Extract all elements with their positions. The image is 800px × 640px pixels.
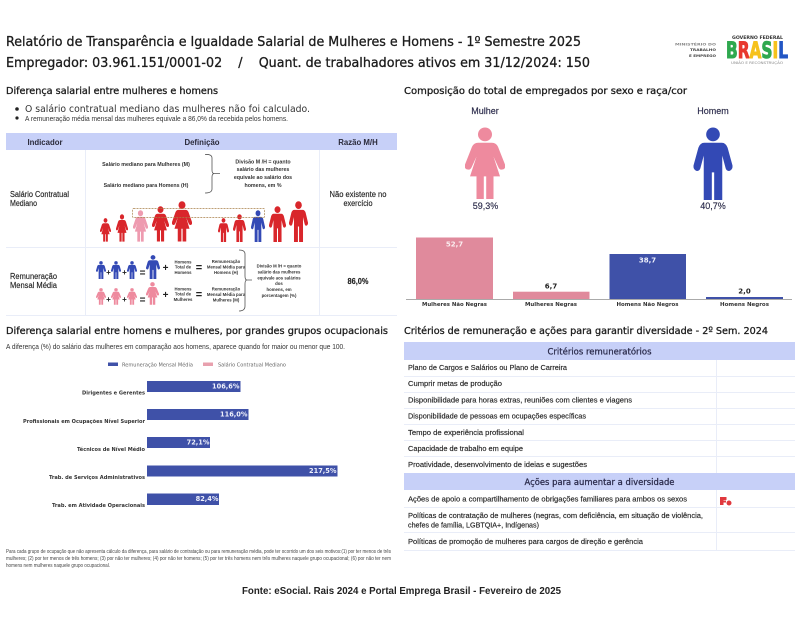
- bar chart: composição por sexo e raça/cor: Homens Negros: [720, 302, 769, 308]
- definition: remuneração mensal média: Homens (H): [214, 270, 239, 275]
- bar chart: composição por sexo e raça/cor: Homens Não Negros: [616, 302, 678, 308]
- logo: ministério e governo federal: MINISTÉRIO DO: [675, 42, 717, 46]
- bar chart: composição por sexo e raça/cor: Mulheres Negras: [525, 302, 577, 308]
- table header: Definição: [184, 138, 220, 147]
- definition: remuneração mensal média: Divisão M /H = quanto: [257, 264, 302, 268]
- definition: remuneração mensal média: dos: [275, 281, 283, 286]
- definition: remuneração mensal média: porcentagem (%): [262, 293, 297, 298]
- pictograma: mulher: Mulher: [471, 106, 499, 116]
- pictograma: homem: 40,7%: [700, 201, 726, 211]
- logo: ministério e governo federal: BRASIL: [726, 39, 788, 64]
- bar chart: composição por sexo e raça/cor: [406, 238, 792, 308]
- panel: critérios e ações: [404, 342, 795, 550]
- row values: Não existente no: [330, 190, 387, 199]
- pictograma: homem: Homem: [697, 106, 729, 116]
- row values: [330, 190, 387, 286]
- table header: Indicador: [27, 138, 63, 147]
- criteria rows: Disponibilidade para horas extras, reuniões com clientes e viagens: [408, 396, 632, 404]
- legend: Salário Contratual Mediano: [218, 362, 286, 368]
- definition: remuneração mensal média: =: [140, 268, 146, 279]
- definition: remuneração mensal média: Total de: [175, 264, 192, 270]
- icon: marcador vermelho: [720, 497, 732, 506]
- heading: diferença por grupos ocupacionais: Diferença salarial entre homens e mulheres, por grandes grupos ocupacionais: [6, 326, 388, 337]
- definition: salário contratual mediano: Salário mediano para Homens (H): [104, 183, 189, 189]
- logo: ministério e governo federal: GOVERNO FEDERAL: [732, 35, 783, 40]
- bullet text block: A remuneração média mensal das mulheres equivale a 86,0% da recebida pelos homens.: [25, 116, 288, 123]
- title: [6, 35, 590, 71]
- row labels: Remuneração: [10, 272, 58, 281]
- criteria rows: Capacidade de trabalho em equipe: [408, 444, 523, 453]
- bar chart: composição por sexo e raça/cor: 6,7: [545, 282, 557, 290]
- definition: remuneração mensal média: +: [122, 268, 127, 277]
- definition: salário contratual mediano: salário das mulheres: [237, 167, 289, 173]
- bullet text block: O salário contratual mediano das mulheres não foi calculado.: [25, 103, 310, 115]
- subtitle: A diferença (%) do salário das mulheres em comparação aos homens, aparece quando for maior ou menor que 100.: [6, 344, 345, 351]
- footnote: homens nem mulheres naquele grupo ocupacional.: [6, 563, 110, 569]
- action rows: Ações de apoio a compartilhamento de obrigações familiares para ambos os sexos: [408, 494, 687, 504]
- definition: remuneração mensal média: =: [196, 262, 202, 274]
- definition: remuneração mensal média: homens, em: [266, 287, 292, 292]
- row labels: [10, 190, 69, 290]
- pictograma: homem: [693, 106, 733, 211]
- definition: remuneração mensal média: Mensal Média para: [207, 292, 246, 297]
- bar chart: composição por sexo e raça/cor: 52,7: [446, 240, 463, 248]
- definition: remuneração mensal média: +: [106, 268, 111, 277]
- definition: remuneração mensal média: Total de: [175, 292, 192, 296]
- row labels: Mensal Média: [10, 281, 58, 290]
- bar chart: grupos ocupacionais: 72,1%: [187, 438, 210, 446]
- title: Relatório de Transparência e Igualdade Salarial de Mulheres e Homens - 1º Semestre 2025: [6, 35, 581, 50]
- row values: exercício: [344, 199, 373, 208]
- header: critérios remuneratórios: Critérios remuneratórios: [548, 346, 652, 358]
- footnote: [6, 549, 391, 569]
- logo: ministério e governo federal: [675, 35, 788, 65]
- definition: salário contratual mediano: equivale ao salário dos: [234, 175, 292, 181]
- definition: salário contratual mediano: [100, 154, 308, 242]
- bar chart: grupos ocupacionais: 106,6%: [212, 382, 240, 390]
- definition: remuneração mensal média: equivale aos salários: [257, 276, 301, 280]
- pictograma: mulher: [465, 106, 505, 211]
- table header: Razão M/H: [338, 138, 378, 147]
- logo: ministério e governo federal: TRABALHO: [690, 47, 717, 52]
- definition: remuneração mensal média: Mulheres (M): [213, 298, 240, 302]
- criteria rows: Proatividade, desenvolvimento de ideias e sugestões: [408, 460, 587, 469]
- footnote: mulheres; (2) por ter menos de três homens; (3) por não ter mulheres; (4) por não ter homens; (5) por ter três homens nem três mulheres naquele grupo ocupacional; (6) por não ter nem: [6, 556, 391, 562]
- definition: remuneração mensal média: =: [140, 295, 146, 306]
- definition: remuneração mensal média: Homens: [175, 260, 192, 264]
- definition: remuneração mensal média: +: [163, 263, 169, 274]
- bar chart: grupos ocupacionais: Técnicos de Nível Médio: [77, 446, 145, 453]
- definition: salário contratual mediano: Divisão M /H = quanto: [235, 160, 291, 166]
- title: Empregador: 03.961.151/0001-02 / Quant. de trabalhadores ativos em 31/12/2024: 150: [6, 56, 590, 71]
- definition: remuneração mensal média: +: [122, 295, 127, 304]
- row labels: Mediano: [10, 199, 37, 208]
- heading: critérios: Critérios de remuneração e ações para garantir diversidade - 2º Sem. 2024: [404, 325, 768, 337]
- legend: Remuneração Mensal Média: [122, 362, 193, 368]
- heading: diferença salarial: Diferença salarial entre mulheres e homens: [6, 86, 218, 97]
- action rows: Políticas de promoção de mulheres para cargos de direção e gerência: [408, 537, 644, 546]
- definition: remuneração mensal média: +: [106, 295, 111, 304]
- panel: tabela de indicadores: [6, 133, 397, 316]
- criteria rows: Plano de Cargos e Salários ou Plano de Carreira: [408, 363, 568, 372]
- bar chart: grupos ocupacionais: Trab. de Serviços Administrativos: [49, 475, 146, 481]
- definition: remuneração mensal média: =: [196, 289, 202, 301]
- definition: remuneração mensal média: Homens: [175, 286, 192, 292]
- legend: [108, 362, 286, 368]
- bar chart: grupos ocupacionais: 217,5%: [309, 467, 337, 475]
- bar chart: grupos ocupacionais: [23, 381, 338, 509]
- logo: ministério e governo federal: E EMPREGO: [689, 53, 717, 58]
- criteria rows: Cumprir metas de produção: [408, 379, 502, 388]
- definition: remuneração mensal média: Mulheres: [174, 297, 193, 302]
- definition: remuneração mensal média: Remuneração: [212, 259, 241, 264]
- definition: remuneração mensal média: salário das mulheres: [258, 270, 301, 274]
- bar chart: composição por sexo e raça/cor: Mulheres Não Negras: [422, 302, 487, 308]
- pictograma: mulher: 59,3%: [473, 201, 498, 211]
- bar chart: grupos ocupacionais: 82,4%: [196, 495, 219, 503]
- criteria rows: Disponibilidade de pessoas em ocupações específicas: [408, 412, 586, 420]
- footnote: Para cada grupo de ocupação que não apresenta cálculo da diferença, para salário de contratação ou para remuneração média, pode ter ocorrido um dos seis motivos:(1) por ter menos de três: [6, 549, 391, 555]
- action rows: chefes de família, LGBTQIA+, Indígenas): [408, 520, 539, 530]
- definition: salário contratual mediano: homens, em %: [244, 183, 282, 189]
- criteria rows: Tempo de experiência profissional: [408, 428, 524, 437]
- bar chart: grupos ocupacionais: Dirigentes e Gerentes: [82, 390, 146, 396]
- definition: remuneração mensal média: Remuneração: [212, 286, 241, 292]
- row labels: Salário Contratual: [10, 190, 69, 199]
- bullet text block: [15, 103, 310, 123]
- header: ações: Ações para aumentar a diversidade: [524, 478, 674, 488]
- bar chart: grupos ocupacionais: 116,0%: [220, 410, 248, 418]
- definition: remuneração mensal média: +: [163, 290, 169, 301]
- bar chart: composição por sexo e raça/cor: 2,0: [738, 288, 751, 296]
- logo: ministério e governo federal: UNIÃO E RECONSTRUÇÃO: [731, 60, 783, 65]
- row values: 86,0%: [348, 277, 368, 286]
- bar chart: grupos ocupacionais: Profissionais em Ocupações Nível Superior: [23, 418, 145, 425]
- action rows: Políticas de contratação de mulheres (negras, com deficiência, em situação de violência,: [408, 511, 703, 520]
- definition: remuneração mensal média: Mensal Média para: [207, 264, 246, 270]
- table header: [27, 138, 378, 147]
- bar chart: composição por sexo e raça/cor: 38,7: [639, 256, 656, 264]
- source: Fonte: eSocial. Rais 2024 e Portal Emprega Brasil - Fevereiro de 2025: [242, 585, 561, 597]
- heading: composição: Composição do total de empregados por sexo e raça/cor: [404, 86, 687, 97]
- definition: remuneração mensal média: Homens: [175, 270, 192, 275]
- bar chart: grupos ocupacionais: Trab. em Atividade Operacionais: [52, 503, 146, 509]
- action rows: [408, 494, 703, 546]
- definition: salário contratual mediano: Salário mediano para Mulheres (M): [102, 162, 190, 168]
- definition: remuneração mensal média: [96, 250, 302, 311]
- criteria rows: [408, 363, 632, 469]
